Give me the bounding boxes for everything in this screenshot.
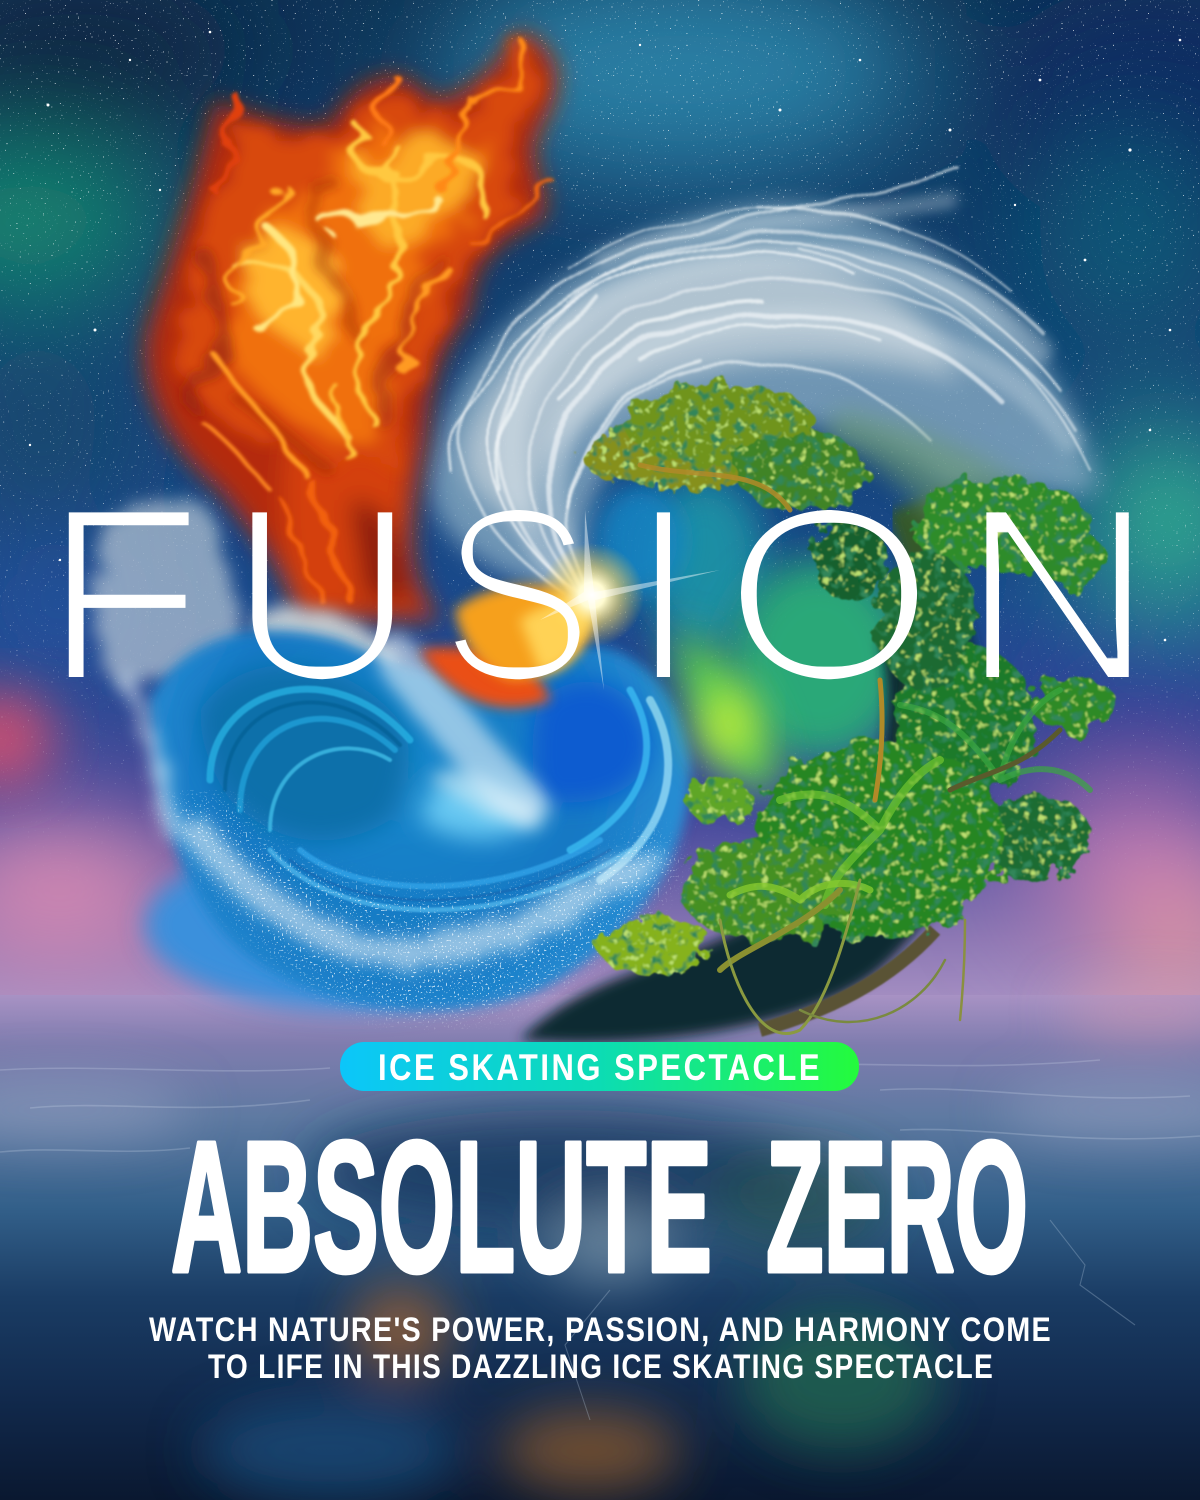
starfield	[0, 0, 1200, 900]
title: FUSION: S	[438, 457, 595, 733]
subtitle text	[149, 1311, 1052, 1386]
frozen lake surface	[0, 990, 1200, 1500]
title: FUSION: N	[959, 456, 1156, 733]
headline: ABSOLUTE ZERO: ABSOLUTE	[171, 1104, 712, 1311]
title: FUSION: F	[42, 456, 204, 733]
subtitle text: TO LIFE IN THIS DAZZLING ICE SKATING SPECTACLE	[208, 1348, 994, 1386]
illustration: fire	[145, 30, 557, 620]
illustration: center light burst	[455, 475, 910, 791]
title: FUSION: I	[629, 455, 698, 733]
badge: ice skating spectacle: ICE SKATING SPECTACLE	[378, 1047, 822, 1088]
background: night sky	[0, 0, 1200, 1010]
title: FUSION	[42, 455, 1156, 733]
illustration: tree island	[520, 383, 1117, 1042]
illustration: ocean wave	[125, 630, 690, 1030]
title: FUSION: O	[723, 456, 935, 733]
illustration: white wind swirl	[429, 170, 1100, 595]
title: FUSION: U	[227, 456, 418, 733]
illustration: sea foam crest	[94, 498, 400, 700]
brighter stars	[29, 31, 1181, 641]
subtitle text: WATCH NATURE'S POWER, PASSION, AND HARMONY COME	[149, 1311, 1052, 1349]
